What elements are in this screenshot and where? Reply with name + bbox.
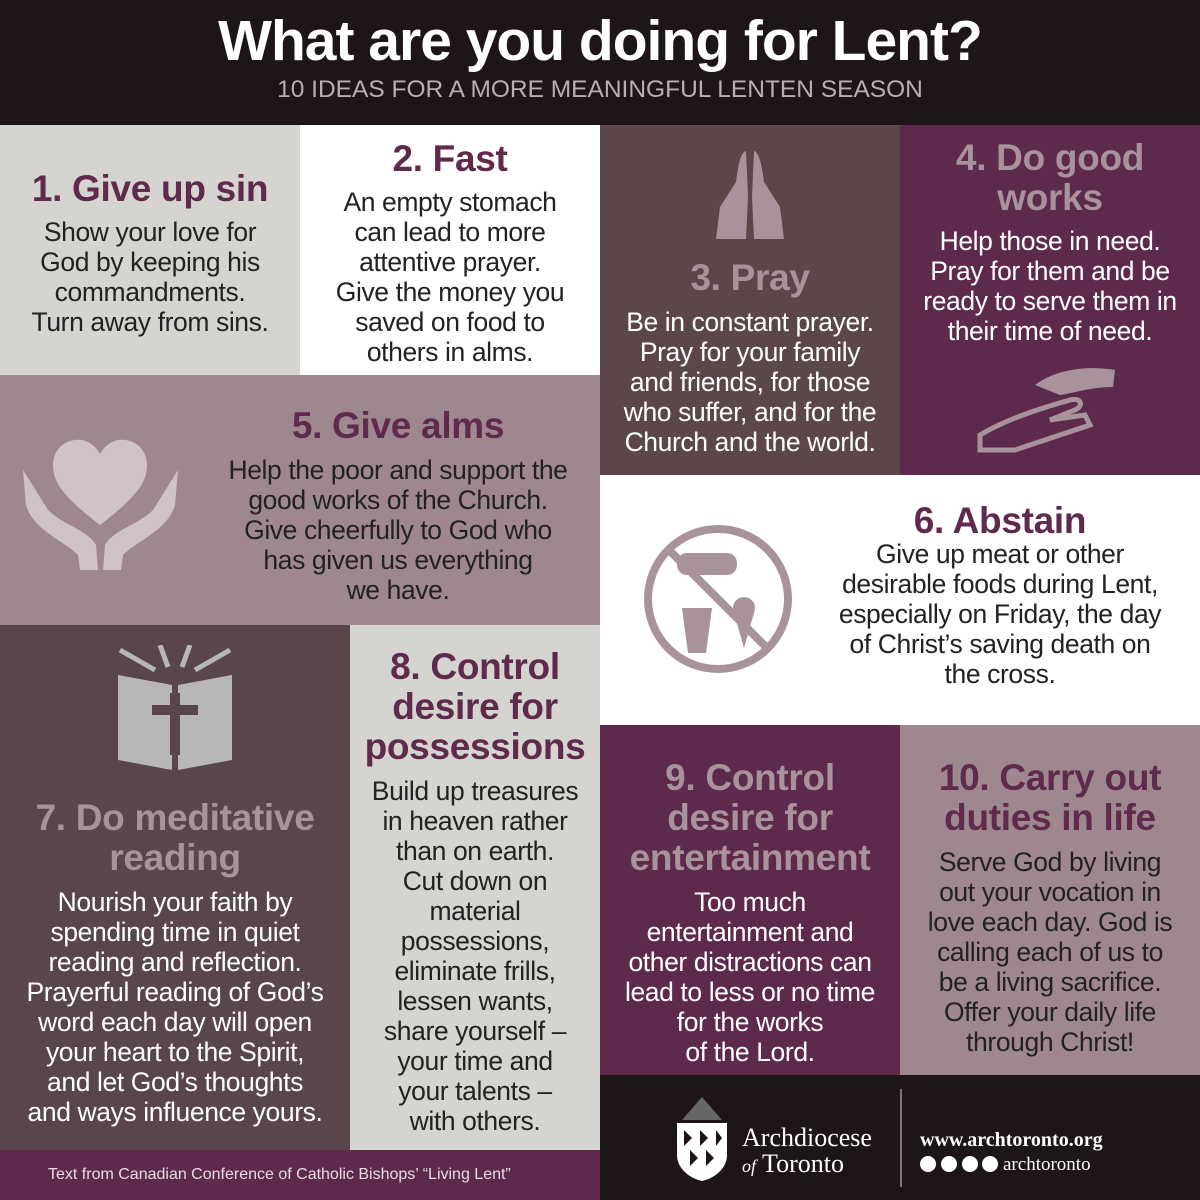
panel 2: Give the money you: [336, 277, 564, 307]
panel 8: than on earth.: [396, 836, 554, 866]
panel 9: desire for: [667, 797, 833, 838]
panel 5: good works of the Church.: [248, 485, 548, 515]
panel 10: Offer your daily life: [944, 997, 1156, 1027]
panel 9: Too much: [694, 887, 806, 917]
panel 9: of the Lord.: [685, 1037, 815, 1067]
footer credit: [0, 1150, 600, 1200]
icon: helping hands: [978, 368, 1115, 452]
panel 1: 1. Give up sin: [32, 168, 268, 209]
panel 4: works: [997, 177, 1103, 218]
panel 9: for the works: [677, 1007, 823, 1037]
panel 6: desirable foods during Lent,: [842, 569, 1158, 599]
panel 9: entertainment: [630, 837, 870, 878]
panel 10: calling each of us to: [937, 937, 1163, 967]
panel 10: through Christ!: [966, 1027, 1134, 1057]
panel 10: duties in life: [944, 797, 1156, 838]
panel 9: entertainment and: [647, 917, 853, 947]
subtitle: 10 IDEAS FOR A MORE MEANINGFUL LENTEN SEASON: [277, 76, 923, 103]
panel 8: Cut down on: [403, 866, 547, 896]
icon: heart in hands: [23, 440, 178, 570]
logo footer: [600, 1075, 1200, 1200]
panel 7: Nourish your faith by: [58, 887, 292, 917]
panel 5: Give cheerfully to God who: [244, 515, 552, 545]
panel 9: lead to less or no time: [625, 977, 875, 1007]
logo text: [742, 1123, 872, 1178]
panel 9: 9. Control: [665, 757, 835, 798]
panel 3: Be in constant prayer.: [626, 307, 874, 337]
panel 4: their time of need.: [948, 316, 1152, 346]
panel 1: Turn away from sins.: [32, 307, 268, 337]
panel 6: of Christ’s saving death on: [849, 629, 1150, 659]
panel 8: possessions: [365, 726, 585, 767]
panel 6: especially on Friday, the day: [839, 599, 1161, 629]
panel 5: 5. Give alms: [292, 405, 504, 446]
website and social: archtoronto: [1003, 1154, 1091, 1175]
panel 3: Pray for your family: [640, 337, 860, 367]
panel 6: Give up meat or other: [876, 539, 1124, 569]
panel 3: Church and the world.: [625, 427, 875, 457]
panel 3: 3. Pray: [690, 257, 810, 298]
icon: coat of arms: [677, 1097, 727, 1181]
panel 4: Help those in need.: [940, 226, 1160, 256]
panel 10: out your vocation in: [939, 877, 1161, 907]
panel 7: your heart to the Spirit,: [46, 1037, 304, 1067]
website and social: [920, 1129, 1103, 1175]
panel 10: love each day. God is: [928, 907, 1172, 937]
logo text: of Toronto: [742, 1149, 844, 1178]
panel 8: share yourself –: [384, 1016, 566, 1046]
panel 7: and ways influence yours.: [28, 1097, 322, 1127]
panel 2: can lead to more: [354, 217, 546, 247]
panel 4: [900, 125, 1200, 475]
panel 8: with others.: [410, 1106, 540, 1136]
website and social: www.archtoronto.org: [920, 1129, 1103, 1151]
panel 8: possessions,: [401, 926, 549, 956]
panel 5: [0, 375, 600, 625]
panel 2: 2. Fast: [392, 138, 508, 179]
logo text: Archdiocese: [742, 1123, 872, 1152]
panel 7: spending time in quiet: [50, 917, 300, 947]
panel 6: 6. Abstain: [914, 500, 1086, 541]
panel 8: desire for: [392, 686, 558, 727]
icon: no food: [644, 525, 792, 673]
panel 7: Prayerful reading of God’s: [26, 977, 323, 1007]
header: [0, 0, 1200, 125]
panel 3: who suffer, and for the: [624, 397, 876, 427]
panel 2: attentive prayer.: [359, 247, 541, 277]
panel 7: word each day will open: [38, 1007, 312, 1037]
panel 1: commandments.: [55, 277, 245, 307]
panel 7: and let God’s thoughts: [47, 1067, 303, 1097]
panel 5: Help the poor and support the: [228, 455, 568, 485]
panel 9: other distractions can: [628, 947, 872, 977]
panel 2: saved on food to: [355, 307, 545, 337]
panel 5: we have.: [347, 575, 449, 605]
panel 4: ready to serve them in: [923, 286, 1177, 316]
panel 1: Show your love for: [44, 217, 256, 247]
panel 7: reading and reflection.: [48, 947, 302, 977]
panel 6: the cross.: [945, 659, 1055, 689]
panel 10: be a living sacrifice.: [939, 967, 1161, 997]
panel 8: in heaven rather: [382, 806, 568, 836]
panel 4: Pray for them and be: [930, 256, 1170, 286]
panel 6: [600, 475, 1200, 725]
panel 8: lessen wants,: [397, 986, 553, 1016]
panel 8: Build up treasures: [372, 776, 578, 806]
panel 8: your time and: [397, 1046, 553, 1076]
panel 3: and friends, for those: [630, 367, 870, 397]
panel 7: 7. Do meditative: [36, 797, 314, 838]
panel 7: reading: [109, 837, 241, 878]
panel 2: others in alms.: [367, 337, 533, 367]
panel 2: An empty stomach: [343, 187, 557, 217]
panel 10: [900, 725, 1200, 1075]
panel 3: [600, 125, 900, 475]
panel 8: [350, 625, 600, 1150]
panel 8: 8. Control: [390, 646, 560, 687]
panel 4: 4. Do good: [956, 137, 1144, 178]
icon: praying hands: [716, 151, 784, 239]
panel 8: eliminate frills,: [394, 956, 556, 986]
panel 10: 10. Carry out: [939, 757, 1161, 798]
panel 7: [0, 625, 350, 1150]
panel 8: material: [429, 896, 521, 926]
panel 8: your talents –: [398, 1076, 552, 1106]
panel 9: [600, 725, 900, 1075]
panel 2: [300, 125, 600, 375]
footer credit: Text from Canadian Conference of Catholic Bishops’ “Living Lent”: [48, 1166, 511, 1183]
title: What are you doing for Lent?: [218, 9, 982, 73]
icon: bible: [118, 645, 232, 770]
panel 10: Serve God by living: [939, 847, 1161, 877]
panel 1: [0, 125, 300, 375]
panel 1: God by keeping his: [40, 247, 260, 277]
panel 5: has given us everything: [263, 545, 533, 575]
